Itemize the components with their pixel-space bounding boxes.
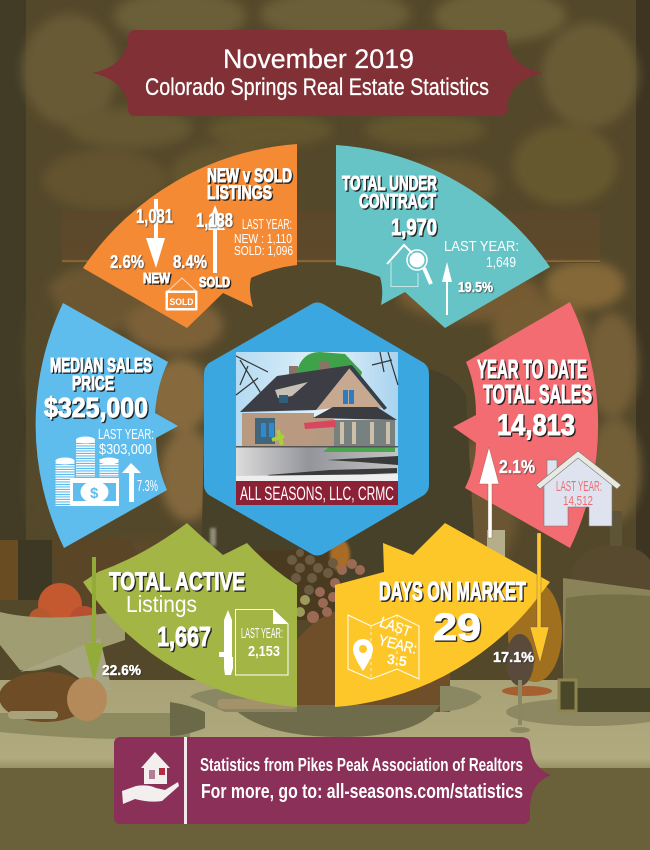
heading: total active: TOTAL ACTIVE — [109, 568, 245, 596]
icon: map with last year figure: 3.5 — [386, 651, 408, 669]
panel: median sales price — [36, 303, 178, 548]
heading: median sales: MEDIAN SALES — [50, 355, 152, 377]
panel: total under contract — [336, 145, 550, 328]
percent: sold: 8.4% — [173, 252, 207, 272]
footer banner — [114, 737, 551, 824]
icon: map with last year figure: LAST — [377, 614, 413, 641]
arrow: up — [122, 463, 141, 502]
number: price: $325,000 — [44, 392, 148, 423]
percent: 2.1% — [499, 457, 535, 477]
footer text line 2: For more, go to: all-seasons.com/statistics — [201, 780, 523, 803]
title line 2: Colorado Springs Real Estate Statistics — [145, 74, 489, 101]
percent: 22.6% — [102, 662, 141, 679]
arrow: down — [530, 533, 549, 663]
arrow: up — [479, 447, 499, 538]
title banner — [92, 30, 543, 116]
percent: new: 2.6% — [110, 252, 144, 272]
icon: sold sign: SOLD — [170, 297, 194, 308]
panel: center hexagon logo — [204, 302, 429, 556]
number: days: 29 — [433, 607, 481, 649]
heading: days on market: DAYS ON MARKET — [379, 576, 526, 606]
heading: listings: Listings — [126, 591, 197, 617]
number: under contract: 1,970 — [391, 214, 437, 240]
icon: house with last year figure: 14,512 — [563, 493, 593, 508]
number: new listings: 1,081 — [136, 206, 173, 228]
last year figures: LAST YEAR: — [444, 239, 519, 255]
hearth behind food — [228, 550, 338, 620]
arrow: new listings down — [146, 199, 165, 268]
heading: contract: CONTRACT — [359, 191, 436, 213]
footer text line 1: Statistics from Pikes Peak Association of Realtors — [200, 754, 523, 775]
heading: new v sold: NEW v SOLD — [207, 166, 292, 187]
percent: 17.1% — [493, 649, 534, 666]
icon: house with last year figure: LAST YEAR: — [556, 478, 602, 495]
icon: house with last year figure — [536, 451, 621, 526]
number: total sales: 14,813 — [497, 409, 575, 442]
last year figures: LAST YEAR: — [98, 426, 154, 443]
hat, pumpkin, candle, glass — [508, 582, 562, 682]
arrow: sold listings up — [206, 205, 225, 273]
divider — [184, 737, 187, 824]
icon: house with magnifier — [387, 245, 431, 286]
last year figures — [234, 217, 293, 258]
icon: pen — [219, 610, 233, 675]
label: new: NEW — [143, 270, 171, 287]
last year figures: $303,000 — [99, 442, 152, 458]
icon: coins and banknote — [56, 436, 119, 506]
panel: year to date total sales — [453, 302, 621, 548]
icon: sold sign — [166, 278, 198, 310]
icon: coins and banknote: $ — [90, 485, 99, 502]
panel: new v sold listings — [83, 144, 297, 328]
logo name bar: ALL SEASONS, LLC, CRMC — [240, 484, 394, 505]
plate, bread and grapes — [297, 608, 450, 712]
heading: listings: LISTINGS — [207, 183, 272, 204]
icon: document with last year figure: LAST YEAR: — [241, 625, 283, 642]
illustration: house — [236, 352, 398, 482]
last year figures — [444, 239, 519, 271]
last year figures: 1,649 — [486, 255, 516, 271]
label: sold: SOLD — [199, 274, 230, 291]
last year figures — [98, 426, 154, 458]
last year figures: SOLD: 1,096 — [234, 244, 293, 258]
number: active listings: 1,667 — [157, 621, 211, 652]
number: sold listings: 1,188 — [196, 210, 233, 232]
icon: document with last year figure: 2,153 — [248, 643, 280, 660]
icon: map with last year figure: YEAR: — [377, 632, 419, 658]
panel: total active listings — [83, 523, 297, 707]
icon: house in hand — [122, 752, 179, 804]
fireplace opening — [200, 366, 478, 610]
last year figures: NEW : 1,110 — [234, 232, 292, 246]
title line 1: November 2019 — [223, 44, 414, 74]
icon: map with last year figure — [348, 614, 419, 679]
arrow: up — [442, 262, 452, 315]
panel: days on market — [335, 523, 550, 707]
heading: price: PRICE — [72, 373, 114, 395]
percent: 19.5% — [458, 279, 493, 296]
icon: document with last year figure — [236, 609, 288, 675]
heading: total under: TOTAL UNDER — [342, 173, 437, 195]
basket & apples — [38, 583, 82, 627]
percent: 7.3% — [137, 478, 158, 495]
arrow: down — [84, 557, 104, 682]
logo name bar — [236, 481, 398, 505]
last year figures: LAST YEAR: — [242, 217, 292, 233]
